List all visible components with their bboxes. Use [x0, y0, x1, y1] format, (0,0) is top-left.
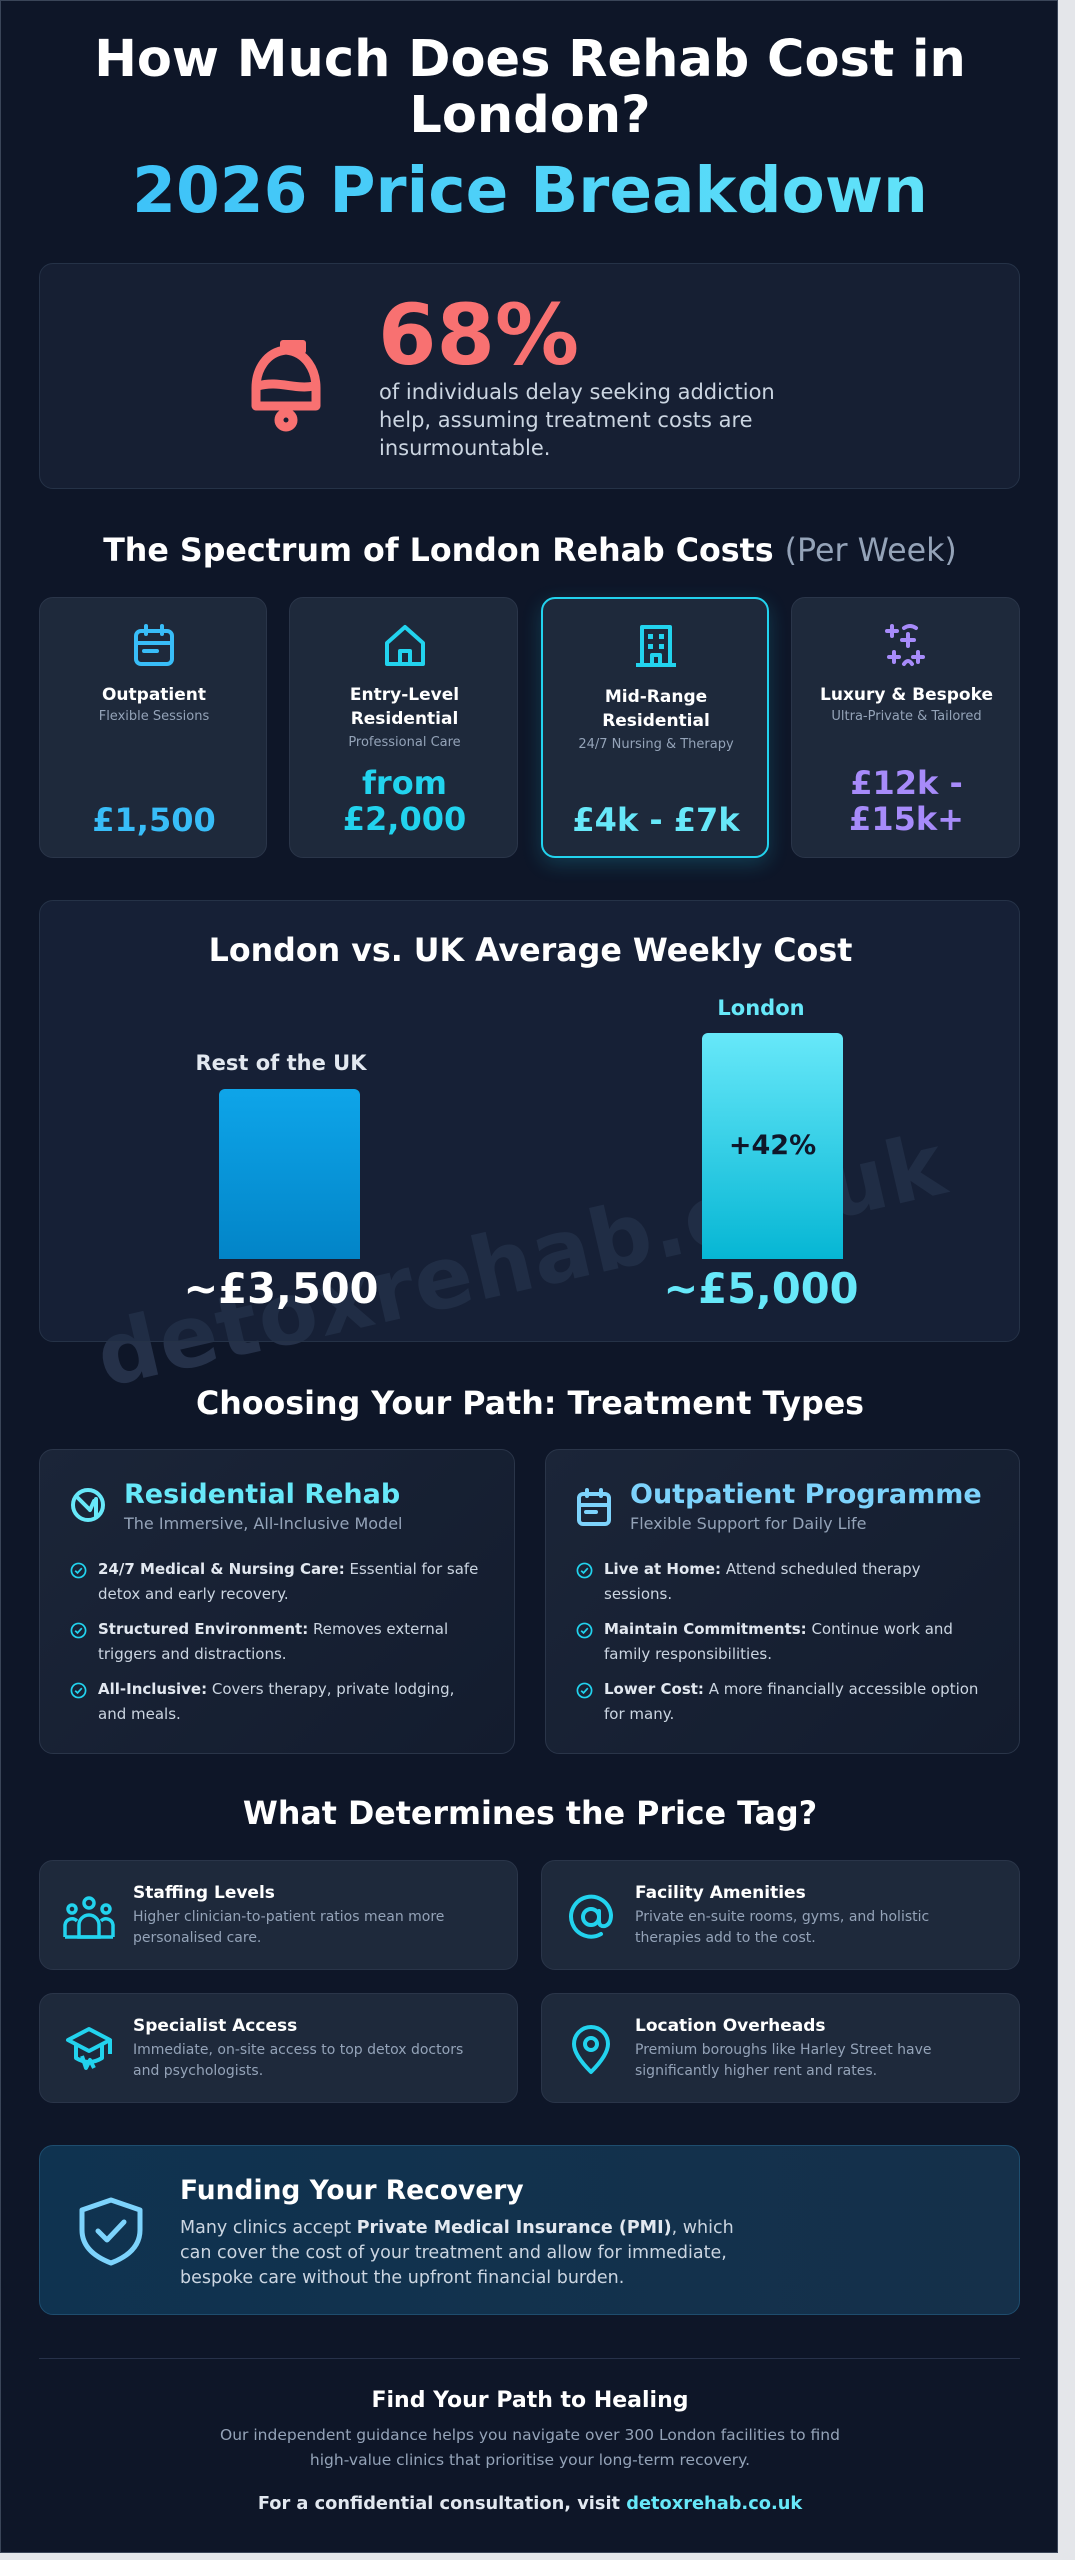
footer: [220, 2388, 840, 2514]
bar: London: ~£5,000: [664, 1264, 858, 1313]
panel: chart: [39, 900, 1020, 1342]
subtitle: 2026 Price Breakdown: [132, 154, 928, 227]
funding title: Funding Your Recovery: [180, 2175, 524, 2206]
heading: spectrum: The Spectrum of London Rehab Costs (Per Week): [103, 533, 957, 569]
icon: graduate: [66, 2027, 112, 2070]
bullets: Live at Home: Attend scheduled therapy sessions.: [604, 1560, 921, 1603]
stat number: 68%: [378, 286, 579, 384]
card: luxury: Ultra-Private & Tailored: [831, 709, 982, 724]
factor: specialist: Immediate, on-site access to top detox doctors and psychologists.: [133, 2042, 463, 2079]
panel: outpatient programme: Flexible Support for Daily Life: [630, 1514, 866, 1533]
bar: London: [664, 996, 858, 1313]
title: Residential Rehab: [124, 1479, 400, 1510]
icon: at sign: [569, 1894, 613, 1939]
bar: rest of UK: [184, 1051, 378, 1313]
factor: staffing: Higher clinician-to-patient ratios mean more personalised care.: [133, 1909, 444, 1946]
bar: rest of UK: Rest of the UK: [195, 1051, 366, 1075]
price: from: [362, 764, 447, 802]
bar: rest of UK: ~£3,500: [184, 1264, 378, 1313]
card: outpatient: [39, 597, 267, 858]
panel: residential rehab: Structured Environment: Removes external triggers and distractions.: [98, 1620, 448, 1663]
factor: location: Premium boroughs like Harley Street have significantly higher rent and rates.: [635, 2042, 931, 2079]
panel: residential rehab: All-Inclusive: Covers therapy, private lodging, and meals.: [98, 1680, 454, 1723]
card: entry-level: Residential: [351, 709, 458, 729]
icon: sparkles: [885, 624, 925, 666]
icon: building: [636, 625, 676, 667]
factor: specialist: [39, 1993, 518, 2103]
icon: house: [385, 624, 425, 666]
panel: outpatient programme: Maintain Commitments: Continue work and family responsibilities.: [604, 1620, 953, 1663]
price: £4k - £7k: [572, 801, 740, 839]
heading: price factors: What Determines the Price Tag?: [243, 1796, 817, 1832]
card: outpatient: Outpatient: [102, 685, 206, 705]
title: [94, 30, 966, 145]
factor: specialist: Specialist Access: [133, 2016, 297, 2036]
footer: Find Your Path to Healing: [371, 2388, 688, 2413]
title: Outpatient Programme: [630, 1479, 982, 1510]
footer: Our independent guidance helps you navigate over 300 London facilities to find high-value clinics that prioritise your long-term recovery.: [220, 2426, 840, 2469]
panel: outpatient programme: [545, 1449, 1020, 1754]
card: outpatient: Flexible Sessions: [99, 709, 209, 724]
price: [849, 764, 964, 838]
card: entry-level: Professional Care: [348, 735, 461, 750]
panel: stat: [39, 263, 1020, 489]
icon: calendar: [577, 1488, 611, 1526]
card: mid-range (highlighted): Mid-Range: [605, 687, 707, 707]
factor: amenities: Facility Amenities: [635, 1883, 806, 1903]
factor: staffing: Staffing Levels: [133, 1883, 275, 1903]
panel: funding: [39, 2145, 1020, 2315]
footer: For a confidential consultation, visit detoxrehab.co.uk: [258, 2493, 802, 2514]
card: luxury: [791, 597, 1020, 858]
factor: location: [541, 1993, 1020, 2103]
card: entry-level: Entry-Level: [350, 685, 459, 705]
watermark: detoxrehab.co.uk: [87, 1115, 955, 1407]
stat text: of individuals delay seeking addiction help, assuming treatment costs are insurmountable.: [379, 380, 775, 460]
price: £12k -: [850, 764, 963, 802]
heading: treatment types: Choosing Your Path: Treatment Types: [196, 1386, 864, 1422]
panel: outpatient programme: Lower Cost: A more financially accessible option for many.: [604, 1680, 978, 1723]
panel: residential rehab: The Immersive, All-Inclusive Model: [124, 1514, 402, 1533]
card: mid-range (highlighted): Residential: [602, 711, 710, 731]
factor: amenities: Private en-suite rooms, gyms, and holistic therapies add to the cost.: [635, 1909, 929, 1946]
subtitle: [1, 151, 1059, 231]
price: £1,500: [92, 801, 216, 839]
bar: London: +42%: [729, 1130, 816, 1161]
icon: bell: [252, 340, 320, 432]
icon: people: [63, 1896, 115, 1939]
title: How Much Does Rehab Cost in: [94, 30, 966, 89]
card: mid-range (highlighted): [541, 597, 769, 858]
icon: residential: [71, 1488, 105, 1522]
price: £2,000: [343, 800, 466, 838]
icon: location pin: [572, 2025, 610, 2074]
panel: residential rehab: [39, 1449, 515, 1754]
card: entry-level: [289, 597, 518, 858]
bar: London: London: [717, 996, 805, 1020]
factor: location: Location Overheads: [635, 2016, 826, 2036]
chart title: London vs. UK Average Weekly Cost: [209, 933, 852, 969]
factor: staffing: [39, 1860, 518, 1970]
icon: calendar: [134, 624, 174, 666]
icon: shield: [80, 2198, 142, 2266]
card: mid-range (highlighted): 24/7 Nursing & Therapy: [578, 737, 734, 752]
price: [343, 764, 466, 838]
card: luxury: Luxury & Bespoke: [820, 685, 993, 705]
factor: amenities: [541, 1860, 1020, 1970]
bullets: 24/7 Medical & Nursing Care: Essential for safe detox and early recovery.: [98, 1560, 478, 1603]
price: £15k+: [849, 800, 964, 838]
title: London?: [409, 86, 651, 145]
funding text: Many clinics accept Private Medical Insurance (PMI), which can cover the cost of your treatment and allow for immediate, bespoke care without the upfront financial burden.: [180, 2218, 734, 2288]
